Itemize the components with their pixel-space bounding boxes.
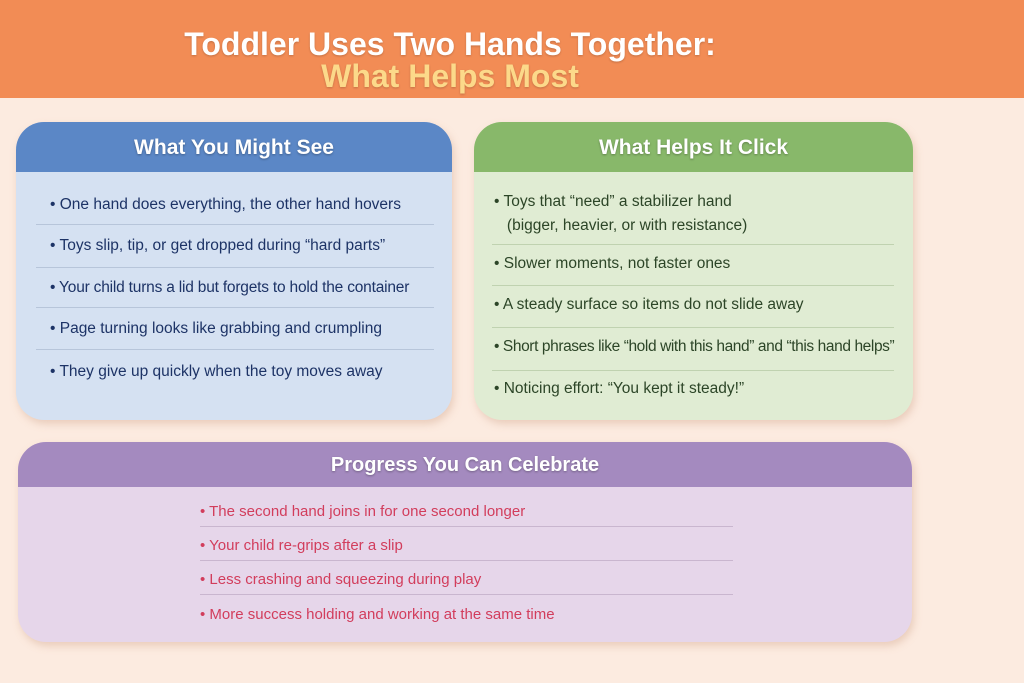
list: • Page turning looks like grabbing and crumpling [50, 320, 382, 337]
list: • Noticing effort: “You kept it steady!” [494, 380, 744, 397]
list: (bigger, heavier, or with resistance) [507, 217, 747, 234]
list: • One hand does everything, the other hand hovers [50, 196, 401, 213]
panel heading: Progress You Can Celebrate [331, 454, 599, 476]
list: • Slower moments, not faster ones [494, 255, 730, 272]
list: • Your child re-grips after a slip [200, 537, 403, 554]
list: • Less crashing and squeezing during play [200, 571, 481, 588]
list [200, 503, 733, 623]
panel heading [16, 122, 452, 172]
list: • Toys that “need” a stabilizer hand [494, 193, 732, 210]
list: • More success holding and working at the same time [200, 606, 555, 623]
list [36, 196, 434, 380]
list [492, 193, 894, 397]
list: • Short phrases like “hold with this hand” and “this hand helps” [494, 338, 894, 355]
panel: what you might see [16, 122, 452, 420]
list: • A steady surface so items do not slide away [494, 296, 804, 313]
panel: progress you can celebrate [18, 442, 912, 642]
header banner [0, 0, 1024, 98]
panel heading [18, 442, 912, 487]
list: • They give up quickly when the toy moves away [50, 363, 383, 380]
panel heading: What You Might See [134, 136, 334, 159]
list: • Your child turns a lid but forgets to hold the container [50, 279, 409, 296]
panel heading [474, 122, 913, 172]
title [184, 26, 716, 96]
list: • The second hand joins in for one second longer [200, 503, 525, 520]
list: • Toys slip, tip, or get dropped during “hard parts” [50, 237, 385, 254]
title: What Helps Most [321, 58, 579, 94]
panel heading: What Helps It Click [599, 136, 788, 159]
title: Toddler Uses Two Hands Together: [184, 26, 716, 62]
panel: what helps it click [474, 122, 913, 420]
